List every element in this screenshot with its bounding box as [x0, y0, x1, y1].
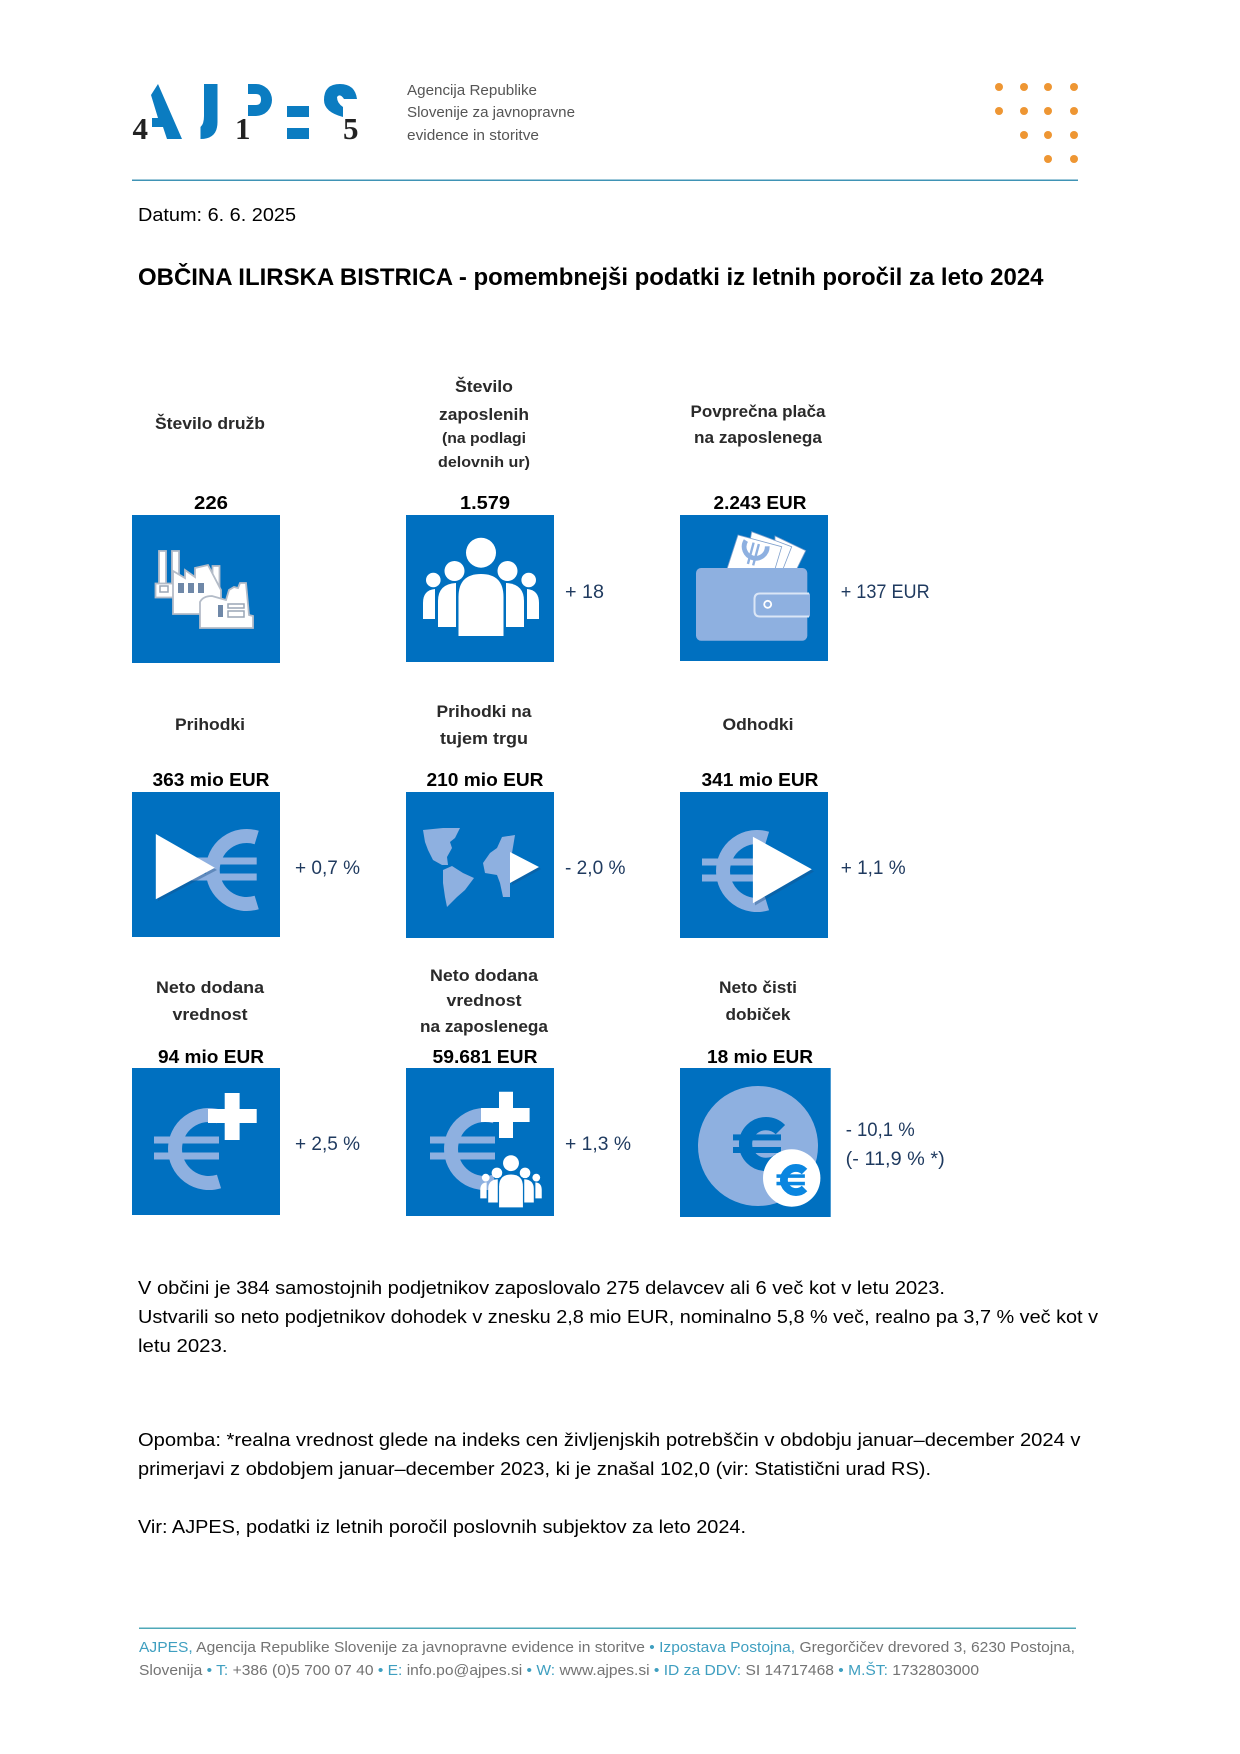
logo: AJPES: 1: [235, 111, 250, 146]
text block: sole proprietors: V občini je 384 samostojnih podjetnikov zaposlovalo 275 delavcev ali 6 več kot v letu 2023.: [138, 1277, 945, 1298]
panel: prihodki na tujem trgu: [406, 702, 626, 938]
change: [846, 1119, 945, 1170]
label: [420, 966, 549, 1036]
icon: world map with arrow: [406, 792, 554, 938]
label: [719, 978, 797, 1024]
change: + 2,5 %: [295, 1133, 360, 1155]
label: na zaposlenega: [694, 428, 823, 447]
text block: source: Vir: AJPES, podatki iz letnih poročil poslovnih subjektov za leto 2024.: [138, 1516, 746, 1537]
label: [436, 702, 532, 748]
icon: coins: [680, 1068, 831, 1217]
label: [438, 377, 530, 471]
label: Število družb: [155, 414, 265, 433]
agency name: Agencija Republike: [407, 82, 537, 99]
value: 94 mio EUR: [158, 1047, 264, 1067]
text block: note: [138, 1429, 1081, 1479]
change: - 10,1 %: [846, 1119, 915, 1141]
label: Prihodki: [175, 715, 245, 734]
panel: odhodki: [680, 715, 906, 938]
footer: contact details: Slovenija • T: +386 (0)5 700 07 40 • E: info.po@ajpes.si • W: www.ajpes.si • ID za DDV: SI 14717468 • M.ŠT: 1732803000: [139, 1662, 979, 1679]
panel: neto dodana vrednost na zaposlenega: [406, 966, 631, 1216]
agency name: evidence in storitve: [407, 127, 539, 144]
label: zaposlenih: [439, 405, 529, 424]
value: 210 mio EUR: [426, 770, 544, 790]
text block: note: primerjavi z obdobjem januar–december 2023, ki je znašal 102,0 (vir: Statistični urad RS).: [138, 1458, 931, 1479]
text block: sole proprietors: letu 2023.: [138, 1335, 228, 1356]
label: Neto dodana: [156, 978, 265, 997]
label: delovnih ur): [438, 454, 530, 471]
icon: factories: [132, 515, 280, 663]
label: [156, 978, 265, 1024]
change: - 2,0 %: [565, 857, 626, 879]
value: 341 mio EUR: [702, 770, 818, 790]
title: OBČINA ILIRSKA BISTRICA - pomembnejši podatki iz letnih poročil za leto 2024: [138, 263, 1044, 291]
agency name: [407, 82, 575, 144]
change: (- 11,9 % *): [846, 1148, 945, 1170]
footer: contact details: AJPES, Agencija Republike Slovenije za javnopravne evidence in storitve • Izpostava Postojna, Gregorčičev drevored 3, 6230 Postojna,: [139, 1639, 1075, 1656]
text block: sole proprietors: Ustvarili so neto podjetnikov dohodek v znesku 2,8 mio EUR, nominalno 5,8 % več, realno pa 3,7 % več kot v: [138, 1306, 1099, 1327]
panel: neto dodana vrednost: [132, 978, 360, 1215]
panel: prihodki: [132, 715, 360, 937]
agency name: Slovenije za javnopravne: [407, 104, 575, 121]
footer: contact details: [139, 1639, 1075, 1679]
value: 59.681 EUR: [432, 1047, 538, 1067]
label: vrednost: [446, 991, 522, 1010]
change: + 1,1 %: [841, 857, 906, 879]
icon: euro plus with people: [406, 1068, 554, 1216]
date: Datum: 6. 6. 2025: [138, 204, 296, 225]
value: 226: [194, 493, 228, 513]
text block: sole proprietors: [138, 1277, 1099, 1356]
label: Prihodki na: [436, 702, 532, 721]
icon: arrow into euro: [132, 792, 280, 937]
decorative dot grid: [995, 83, 1078, 163]
label: tujem trgu: [440, 729, 528, 748]
icon: euro plus: [132, 1068, 280, 1215]
change: + 0,7 %: [295, 857, 360, 879]
label: na zaposlenega: [420, 1017, 549, 1036]
panel: število zaposlenih: [406, 377, 604, 662]
icon: euro with outgoing arrow: [680, 792, 828, 938]
panel: število družb: [132, 414, 280, 663]
value: 1.579: [460, 493, 510, 513]
header: logo and agency name: [132, 82, 1078, 163]
label: Povprečna plača: [690, 402, 826, 421]
label: [690, 402, 826, 447]
label: vrednost: [172, 1005, 248, 1024]
change: + 1,3 %: [565, 1133, 631, 1155]
label: Število: [455, 377, 513, 396]
label: (na podlagi: [442, 430, 526, 447]
change: + 137 EUR: [841, 581, 930, 603]
value: 2.243 EUR: [714, 493, 806, 513]
icon: people: [406, 515, 554, 662]
logo: AJPES: [132, 84, 358, 146]
icon: wallet: [680, 515, 828, 661]
panel: neto čisti dobiček: [680, 978, 945, 1217]
value: 363 mio EUR: [152, 770, 270, 790]
change: + 18: [565, 581, 604, 603]
logo: AJPES: 4: [132, 111, 148, 146]
label: dobiček: [726, 1005, 791, 1024]
label: Neto dodana: [430, 966, 539, 985]
label: Odhodki: [722, 715, 794, 734]
text block: note: Opomba: *realna vrednost glede na indeks cen življenjskih potrebščin v obdobju januar–december 2024 v: [138, 1429, 1081, 1450]
label: Neto čisti: [719, 978, 797, 997]
logo: AJPES: 5: [343, 111, 358, 146]
panel: povprečna plača: [680, 402, 930, 661]
value: 18 mio EUR: [707, 1047, 813, 1067]
